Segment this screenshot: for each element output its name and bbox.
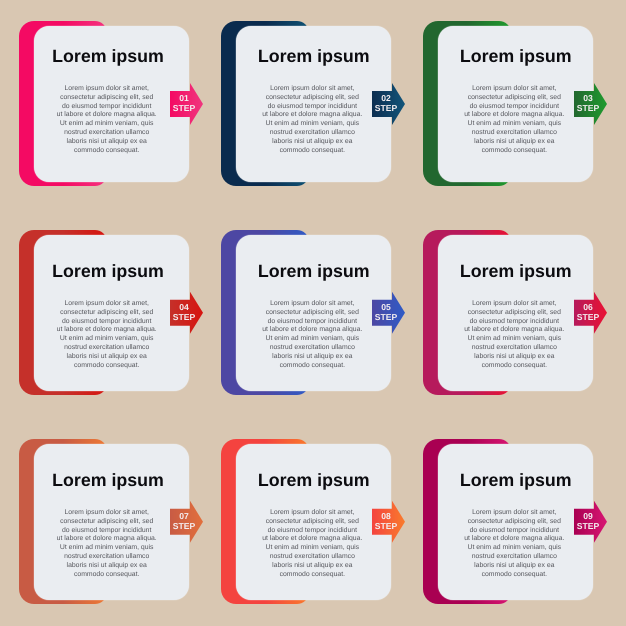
body text: nostrud exercitation ullamco xyxy=(472,344,557,351)
front panel xyxy=(438,235,593,391)
body text xyxy=(464,509,564,578)
body text: consectetur adipiscing elit, sed xyxy=(60,518,153,525)
body text: commodo consequat. xyxy=(280,571,345,578)
step arrow 07 xyxy=(170,501,203,542)
body text: ut labore et dolore magna aliqua. xyxy=(262,111,362,118)
body text: Lorem ipsum dolor sit amet, xyxy=(270,85,355,92)
body text: nostrud exercitation ullamco xyxy=(270,129,355,136)
body text: consectetur adipiscing elit, sed xyxy=(468,309,561,316)
card 03 xyxy=(423,21,607,186)
body text: nostrud exercitation ullamco xyxy=(472,553,557,560)
body text: do eiusmod tempor incididunt xyxy=(470,318,559,325)
body text: laboris nisi ut aliquip ex ea xyxy=(67,353,147,360)
front panel xyxy=(438,26,593,182)
step arrow 08: STEP xyxy=(375,521,397,531)
step arrow 08: 08 xyxy=(381,511,391,521)
body text: ut labore et dolore magna aliqua. xyxy=(57,535,157,542)
body text: Lorem ipsum dolor sit amet, xyxy=(64,85,149,92)
body text: consectetur adipiscing elit, sed xyxy=(266,94,359,101)
step arrow 09 xyxy=(574,501,607,543)
body text: do eiusmod tempor incididunt xyxy=(62,318,151,325)
body text: Lorem ipsum dolor sit amet, xyxy=(472,509,557,516)
body text xyxy=(464,300,564,369)
step arrow 03: STEP xyxy=(577,103,599,113)
heading: Lorem ipsum xyxy=(258,470,370,490)
body text: commodo consequat. xyxy=(482,571,547,578)
body text: ut labore et dolore magna aliqua. xyxy=(464,111,564,118)
step arrow 03: 03 xyxy=(583,93,593,103)
body text: Ut enim ad minim veniam, quis xyxy=(266,544,359,551)
body text: commodo consequat. xyxy=(74,147,139,154)
body text: ut labore et dolore magna aliqua. xyxy=(57,326,157,333)
step arrow 09: STEP xyxy=(577,521,599,531)
card 01 xyxy=(19,21,203,186)
body text: commodo consequat. xyxy=(482,147,547,154)
body text xyxy=(57,85,157,154)
step arrow 01 xyxy=(170,83,203,125)
front panel xyxy=(34,26,189,182)
body text: ut labore et dolore magna aliqua. xyxy=(57,111,157,118)
front panel xyxy=(34,235,189,391)
step arrow 04: 04 xyxy=(179,302,189,312)
body text: Ut enim ad minim veniam, quis xyxy=(266,335,359,342)
body text: consectetur adipiscing elit, sed xyxy=(60,309,153,316)
body text: ut labore et dolore magna aliqua. xyxy=(262,326,362,333)
body text: consectetur adipiscing elit, sed xyxy=(266,309,359,316)
body text: Lorem ipsum dolor sit amet, xyxy=(472,300,557,307)
body text: commodo consequat. xyxy=(74,362,139,369)
body text: Ut enim ad minim veniam, quis xyxy=(266,120,359,127)
step arrow 04: STEP xyxy=(173,312,195,322)
step arrow 03 xyxy=(574,83,607,125)
heading: Lorem ipsum xyxy=(52,261,164,281)
body text: laboris nisi ut aliquip ex ea xyxy=(474,138,554,145)
body text: nostrud exercitation ullamco xyxy=(64,129,149,136)
back panel xyxy=(19,21,107,186)
body text: do eiusmod tempor incididunt xyxy=(268,527,357,534)
body text: Ut enim ad minim veniam, quis xyxy=(60,544,153,551)
body text: nostrud exercitation ullamco xyxy=(64,344,149,351)
body text xyxy=(262,85,362,154)
heading: Lorem ipsum xyxy=(258,261,370,281)
body text xyxy=(57,509,157,578)
card 08 xyxy=(221,439,405,604)
body text: laboris nisi ut aliquip ex ea xyxy=(474,562,554,569)
body text: consectetur adipiscing elit, sed xyxy=(468,94,561,101)
front panel xyxy=(236,444,391,600)
body text: Lorem ipsum dolor sit amet, xyxy=(270,300,355,307)
body text: Ut enim ad minim veniam, quis xyxy=(468,335,561,342)
back panel xyxy=(423,439,511,604)
step arrow 07: STEP xyxy=(173,521,195,531)
back panel xyxy=(221,439,309,604)
heading: Lorem ipsum xyxy=(460,46,572,66)
front panel xyxy=(34,444,189,600)
body text xyxy=(57,300,157,369)
step arrow 05 xyxy=(372,292,405,334)
front panel xyxy=(236,26,391,182)
heading: Lorem ipsum xyxy=(52,470,164,490)
back panel xyxy=(423,21,511,186)
body text: ut labore et dolore magna aliqua. xyxy=(464,535,564,542)
body text: commodo consequat. xyxy=(280,362,345,369)
step arrow 05: 05 xyxy=(381,302,391,312)
body text: do eiusmod tempor incididunt xyxy=(470,103,559,110)
step arrow 04 xyxy=(170,292,203,334)
card 09 xyxy=(423,439,607,604)
body text: do eiusmod tempor incididunt xyxy=(268,318,357,325)
step arrow 02 xyxy=(372,83,405,125)
heading: Lorem ipsum xyxy=(460,470,572,490)
card 04 xyxy=(19,230,203,395)
heading: Lorem ipsum xyxy=(52,46,164,66)
body text: do eiusmod tempor incididunt xyxy=(470,527,559,534)
body text: laboris nisi ut aliquip ex ea xyxy=(67,138,147,145)
heading: Lorem ipsum xyxy=(460,261,572,281)
card 02 xyxy=(221,21,405,186)
back panel xyxy=(19,439,107,604)
body text: consectetur adipiscing elit, sed xyxy=(266,518,359,525)
body text: ut labore et dolore magna aliqua. xyxy=(464,326,564,333)
body text: commodo consequat. xyxy=(74,571,139,578)
body text: do eiusmod tempor incididunt xyxy=(62,103,151,110)
body text: laboris nisi ut aliquip ex ea xyxy=(474,353,554,360)
body text xyxy=(464,85,564,154)
body text: Lorem ipsum dolor sit amet, xyxy=(64,300,149,307)
body text: Lorem ipsum dolor sit amet, xyxy=(472,85,557,92)
step arrow 02: 02 xyxy=(381,93,391,103)
body text: Ut enim ad minim veniam, quis xyxy=(468,544,561,551)
card 06 xyxy=(423,230,607,395)
card 07 xyxy=(19,439,203,604)
body text: nostrud exercitation ullamco xyxy=(64,553,149,560)
back panel xyxy=(221,230,309,395)
body text xyxy=(262,509,362,578)
body text: do eiusmod tempor incididunt xyxy=(268,103,357,110)
body text: Ut enim ad minim veniam, quis xyxy=(468,120,561,127)
body text: consectetur adipiscing elit, sed xyxy=(468,518,561,525)
body text: ut labore et dolore magna aliqua. xyxy=(262,535,362,542)
step arrow 01: STEP xyxy=(173,103,195,113)
back panel xyxy=(19,230,107,395)
body text: nostrud exercitation ullamco xyxy=(472,129,557,136)
back panel xyxy=(423,230,511,395)
body text: Ut enim ad minim veniam, quis xyxy=(60,335,153,342)
body text: commodo consequat. xyxy=(280,147,345,154)
body text: consectetur adipiscing elit, sed xyxy=(60,94,153,101)
body text: Lorem ipsum dolor sit amet, xyxy=(270,509,355,516)
body text: laboris nisi ut aliquip ex ea xyxy=(272,138,352,145)
body text: nostrud exercitation ullamco xyxy=(270,344,355,351)
body text: do eiusmod tempor incididunt xyxy=(62,527,151,534)
body text: laboris nisi ut aliquip ex ea xyxy=(67,562,147,569)
front panel xyxy=(236,235,391,391)
body text: Ut enim ad minim veniam, quis xyxy=(60,120,153,127)
step arrow 05: STEP xyxy=(375,312,397,322)
body text: nostrud exercitation ullamco xyxy=(270,553,355,560)
body text xyxy=(262,300,362,369)
heading: Lorem ipsum xyxy=(258,46,370,66)
body text: commodo consequat. xyxy=(482,362,547,369)
step arrow 06: 06 xyxy=(583,302,593,312)
step arrow 06 xyxy=(574,292,607,334)
body text: Lorem ipsum dolor sit amet, xyxy=(64,509,149,516)
card 05 xyxy=(221,230,405,395)
body text: laboris nisi ut aliquip ex ea xyxy=(272,353,352,360)
step arrow 09: 09 xyxy=(583,511,593,521)
step arrow 08 xyxy=(372,501,405,543)
front panel xyxy=(438,444,593,600)
step arrow 07: 07 xyxy=(179,511,189,521)
step arrow 02: STEP xyxy=(375,103,397,113)
step arrow 06: STEP xyxy=(577,312,599,322)
step arrow 01: 01 xyxy=(179,93,189,103)
body text: laboris nisi ut aliquip ex ea xyxy=(272,562,352,569)
back panel xyxy=(221,21,309,186)
